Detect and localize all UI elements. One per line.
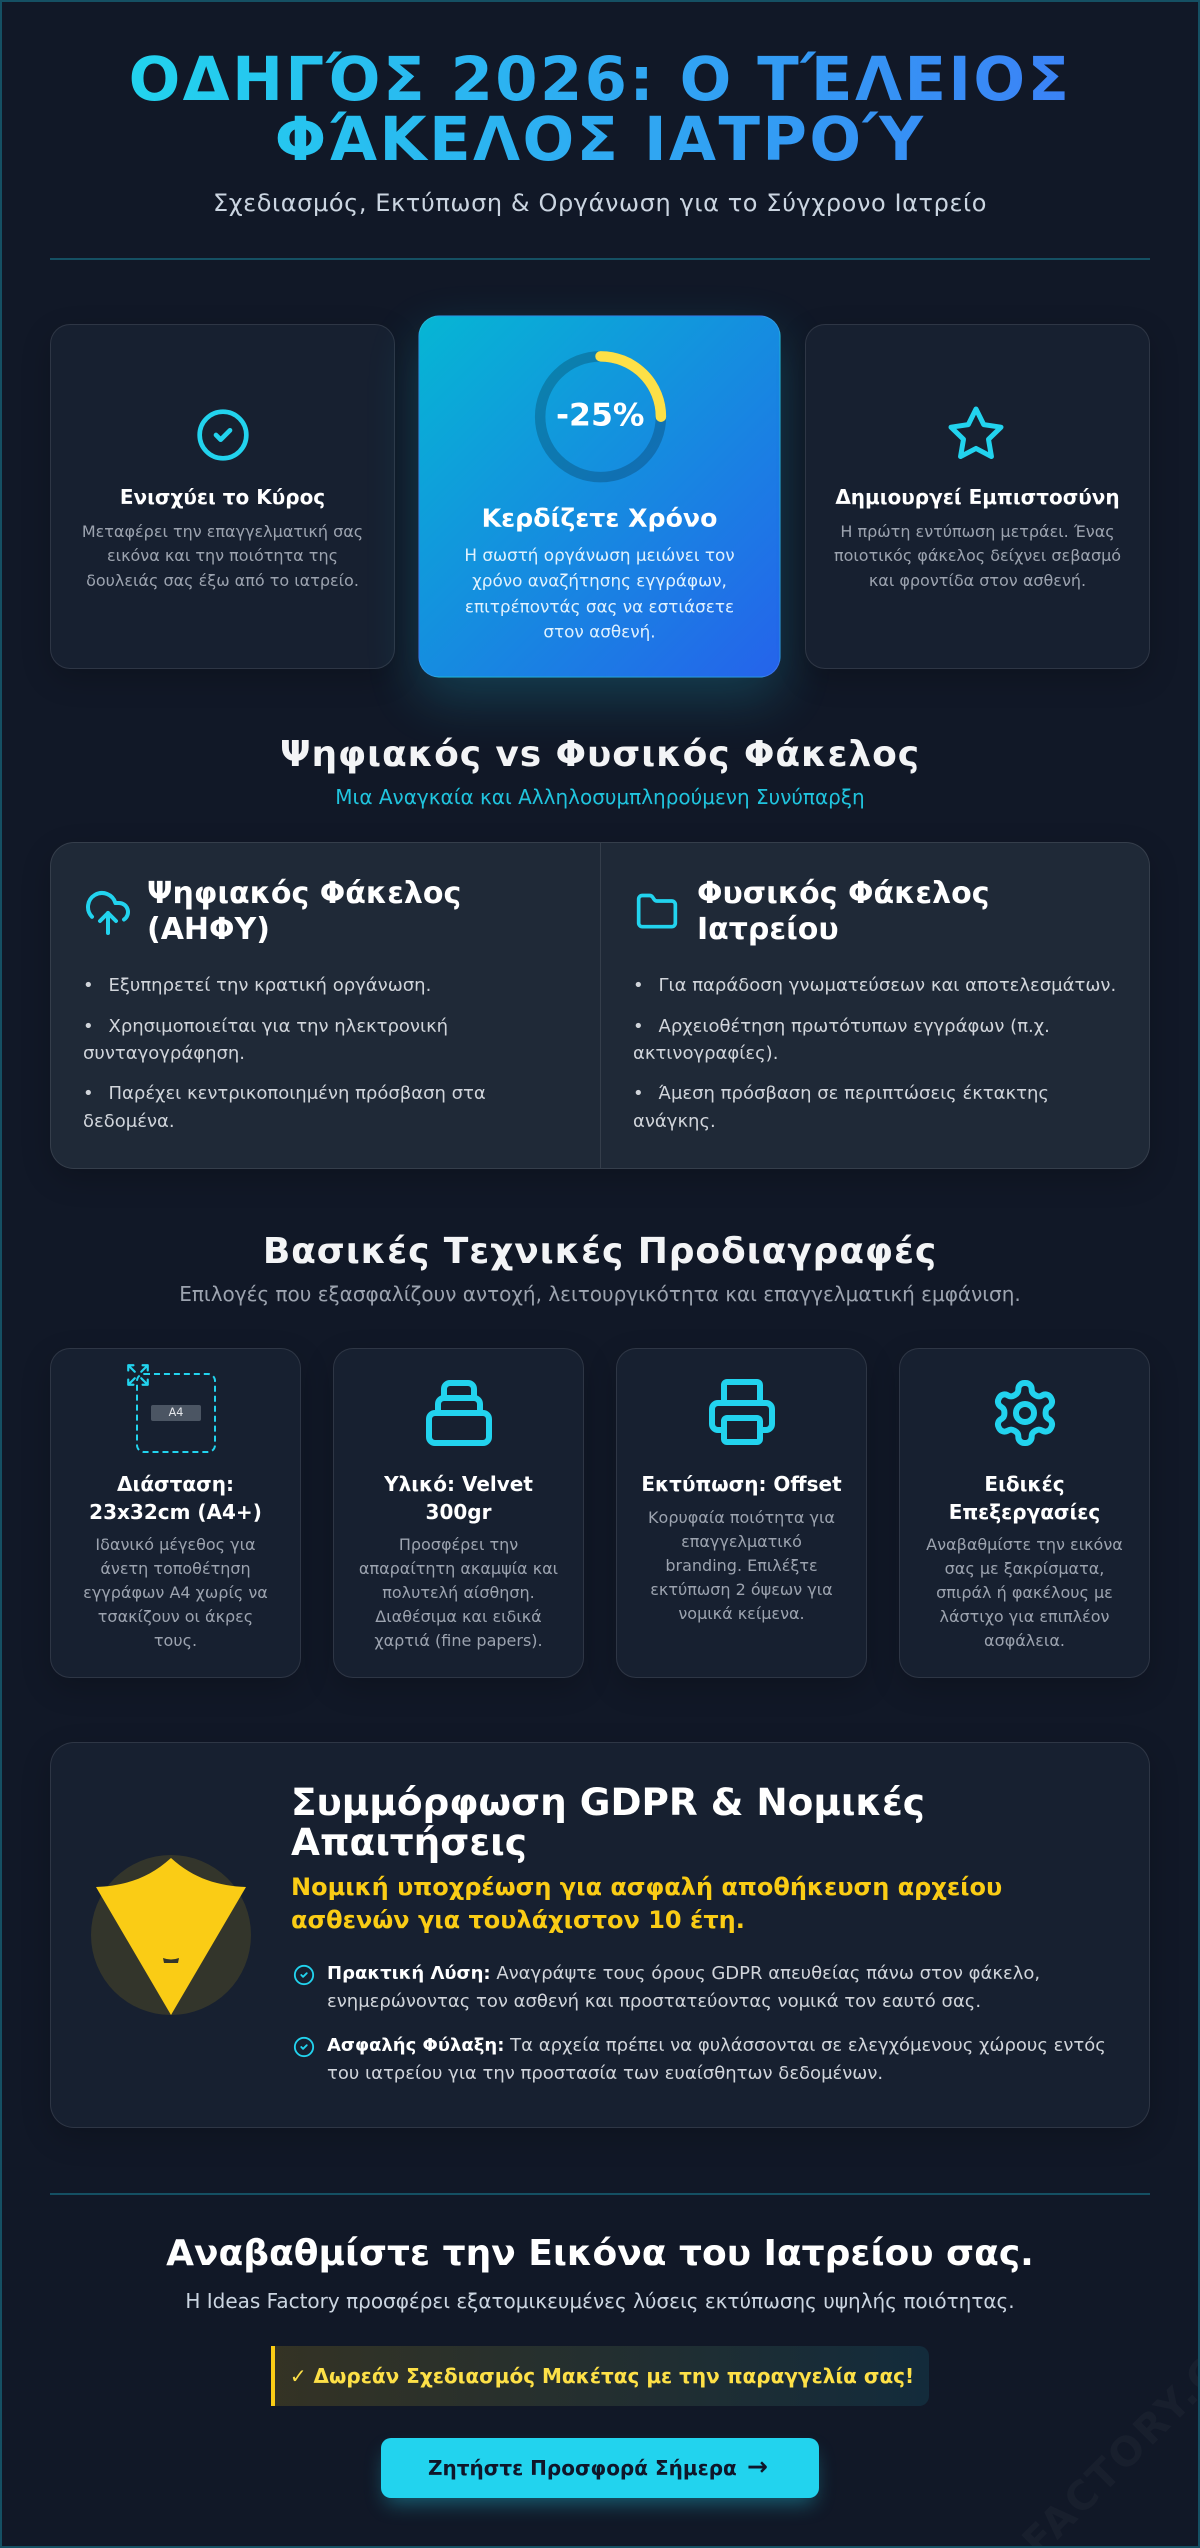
column list: • [83, 1016, 94, 1037]
icon: folder [636, 894, 678, 928]
panel: spec printing [616, 1348, 867, 1678]
card text [465, 545, 735, 642]
title: ΦΆΚΕΛΟΣ ΙΑΤΡΟΎ [275, 105, 925, 175]
card heading: 300gr [426, 1500, 491, 1524]
card text: χρόνο αναζήτησης εγγράφων, [472, 571, 727, 591]
point: secure storage [294, 2035, 1106, 2084]
card text: Η πρώτη εντύπωση μετράει. Ένας [840, 522, 1115, 541]
column list: Εξυπηρετεί την κρατική οργάνωση. [108, 975, 431, 996]
card text: πολυτελή αίσθηση. [382, 1583, 535, 1602]
panel: spec size [50, 1348, 301, 1678]
panel: spec finishing [899, 1348, 1150, 1678]
card text: Η σωστή οργάνωση μειώνει τον [465, 545, 735, 565]
icon: gear [994, 1380, 1056, 1446]
GDPR heading: Συμμόρφωση GDPR & Νομικές [291, 1780, 925, 1824]
card heading: Κερδίζετε Χρόνο [482, 503, 718, 533]
card heading [384, 1472, 533, 1524]
point text [327, 2035, 1106, 2084]
card text: Ιδανικό μέγεθος για [95, 1535, 256, 1554]
panel: benefit time highlighted [419, 315, 781, 678]
column list [633, 975, 1116, 1132]
panel: benefit authority [50, 324, 395, 669]
card text: ασφάλεια. [984, 1631, 1065, 1650]
column list: Για παράδοση γνωματεύσεων και αποτελεσμάτων. [658, 975, 1116, 996]
subheading: digital vs physical: Μια Αναγκαία και Αλληλοσυμπληρούμενη Συνύπαρξη [335, 785, 865, 809]
column list: δεδομένα. [83, 1111, 175, 1132]
point text: ενημερώνοντας τον ασθενή και προστατεύοντας νομικά τον εαυτό σας. [327, 1991, 981, 2012]
card heading: Υλικό: Velvet [384, 1472, 533, 1496]
icon: star [948, 406, 1004, 459]
card text: σπιράλ ή φακέλους με [936, 1583, 1113, 1602]
card text: τους. [154, 1631, 197, 1650]
card heading: Εκτύπωση: Offset [641, 1472, 842, 1496]
column: digital file [51, 843, 601, 1168]
column heading [697, 876, 989, 946]
card text: Κορυφαία ποιότητα για [648, 1508, 835, 1527]
card heading: Δημιουργεί Εμπιστοσύνη [835, 485, 1120, 509]
title: ΟΔΗΓΌΣ 2026: Ο ΤΈΛΕΙΟΣ [129, 45, 1071, 115]
column list: συνταγογράφηση. [83, 1043, 245, 1064]
card text: εκτύπωση 2 όψεων για [650, 1580, 833, 1599]
card heading: Επεξεργασίες [949, 1500, 1100, 1524]
panel: spec material [333, 1348, 584, 1678]
column heading: Ψηφιακός Φάκελος [147, 876, 461, 911]
panel: benefit trust [805, 324, 1150, 669]
icon: arrow right: → [747, 2452, 768, 2481]
subheading: technical specifications: Επιλογές που εξασφαλίζουν αντοχή, λειτουργικότητα και επαγγελματική εμφάνιση. [179, 1282, 1021, 1306]
column list: • [633, 1016, 644, 1037]
column list: • [633, 1083, 644, 1104]
card heading: Ενισχύει το Κύρος [120, 485, 325, 509]
column heading [147, 876, 461, 946]
legal obligation [291, 1873, 1002, 1934]
icon: check [294, 1964, 314, 1986]
card text: επαγγελματικό [681, 1532, 802, 1551]
GDPR heading [291, 1780, 925, 1864]
panel: comparison [50, 842, 1150, 1169]
gauge: minus 25 percent [535, 351, 666, 482]
card text [82, 522, 363, 590]
point text: Ασφαλής Φύλαξη: Τα αρχεία πρέπει να φυλάσσονται σε ελεγχόμενους χώρους εντός [327, 2035, 1106, 2056]
call to action [166, 2232, 1034, 2515]
heading: technical specifications: Βασικές Τεχνικές Προδιαγραφές [263, 1231, 937, 1272]
icon: printer [709, 1379, 775, 1445]
card text: νομικά κείμενα. [678, 1604, 805, 1623]
point: practical solution [294, 1963, 1040, 2012]
card text [83, 1535, 268, 1650]
gauge value: -25% [556, 397, 645, 434]
card heading [89, 1472, 262, 1524]
heading: digital vs physical: Ψηφιακός vs Φυσικός Φάκελος [280, 734, 920, 775]
column list [83, 975, 486, 1132]
column list: • [83, 1083, 94, 1104]
button label: Ζητήστε Προσφορά Σήμερα [428, 2456, 737, 2480]
column heading: Ιατρείου [697, 912, 839, 946]
button: request offer [381, 2438, 819, 2498]
card text: άνετη τοποθέτηση [100, 1559, 251, 1578]
point text: του ιατρείου για την προστασία των ευαίσθητων δεδομένων. [327, 2063, 883, 2084]
card text: Αναβαθμίστε την εικόνα [926, 1535, 1123, 1554]
legal obligation: ασθενών για τουλάχιστον 10 έτη. [291, 1906, 745, 1934]
free design callout [271, 2346, 929, 2406]
column list: ακτινογραφίες). [633, 1043, 778, 1064]
point text: Πρακτική Λύση: Αναγράψτε τους όρους GDPR απευθείας πάνω στον φάκελο, [327, 1963, 1040, 1984]
card text: δουλειάς σας έξω από το ιατρείο. [86, 571, 359, 590]
icon: cloud upload [86, 890, 130, 935]
A4 tag: A4 [169, 1406, 183, 1419]
icon: check circle [197, 409, 249, 461]
card text [926, 1535, 1123, 1650]
subtitle: Σχεδιασμός, Εκτύπωση & Οργάνωση για το Σύγχρονο Ιατρείο [213, 189, 987, 217]
column: physical file [633, 876, 1116, 1132]
card text: στον ασθενή. [544, 622, 656, 642]
column list: Αρχειοθέτηση πρωτότυπων εγγράφων (π.χ. [658, 1016, 1050, 1037]
column heading: Φυσικός Φάκελος [697, 876, 989, 911]
card heading: Διάσταση: [117, 1472, 234, 1496]
column list: • [633, 975, 644, 996]
legal obligation: Νομική υποχρέωση για ασφαλή αποθήκευση αρχείου [291, 1873, 1002, 1901]
title [128, 50, 1072, 170]
column list: Άμεση πρόσβαση σε περιπτώσεις έκτακτης [658, 1083, 1049, 1104]
callout text: ✓ Δωρεάν Σχεδιασμός Μακέτας με την παραγγελία σας! [290, 2364, 914, 2388]
icon: layered paper [426, 1380, 492, 1446]
A4 tag [151, 1405, 201, 1421]
column list: • [83, 975, 94, 996]
card heading: 23x32cm (A4+) [89, 1500, 262, 1524]
card text: branding. Επιλέξτε [665, 1556, 818, 1575]
card text: επιτρέποντάς σας να εστιάσετε [465, 596, 734, 616]
card heading [949, 1472, 1100, 1524]
column heading: (ΑΗΦΥ) [147, 912, 270, 946]
card text: και φροντίδα στον ασθενή. [869, 571, 1086, 590]
card text: εγγράφων Α4 χωρίς να [83, 1583, 268, 1602]
CTA text: Η Ideas Factory προσφέρει εξατομικευμένες λύσεις εκτύπωσης υψηλής ποιότητας. [185, 2289, 1015, 2313]
header [129, 45, 1071, 217]
column list: ανάγκης. [633, 1111, 716, 1132]
icon: yellow shield [91, 1855, 251, 2015]
card text [834, 522, 1121, 590]
panel: GDPR compliance [50, 1742, 1150, 2128]
point text [327, 1963, 1040, 2012]
column list: Χρησιμοποιείται για την ηλεκτρονική [108, 1016, 448, 1037]
icon: expand arrows [127, 1364, 149, 1386]
icon: A4 dashed sheet [136, 1373, 216, 1453]
card text [648, 1508, 835, 1623]
card text: ποιοτικός φάκελος δείχνει σεβασμό [834, 546, 1121, 565]
GDPR heading: Απαιτήσεις [291, 1820, 527, 1864]
card text: χαρτιά (fine papers). [374, 1631, 543, 1650]
icon: check [294, 2036, 314, 2058]
card text: απαραίτητη ακαμψία και [359, 1559, 558, 1578]
card text: εικόνα και την ποιότητα της [107, 546, 338, 565]
column list: Παρέχει κεντρικοποιημένη πρόσβαση στα [108, 1083, 486, 1104]
card text: σας με ξακρίσματα, [945, 1559, 1104, 1578]
card text: Διαθέσιμα και ειδικά [375, 1607, 542, 1626]
card text: λάστιχο για επιπλέον [939, 1607, 1110, 1626]
CTA heading: Αναβαθμίστε την Εικόνα του Ιατρείου σας. [166, 2232, 1034, 2274]
card heading: Ειδικές [984, 1472, 1065, 1496]
card text: Προσφέρει την [399, 1535, 518, 1554]
card text: τσακίζουν οι άκρες [98, 1607, 253, 1626]
card text: Μεταφέρει την επαγγελματική σας [82, 522, 363, 541]
card text [359, 1535, 558, 1650]
